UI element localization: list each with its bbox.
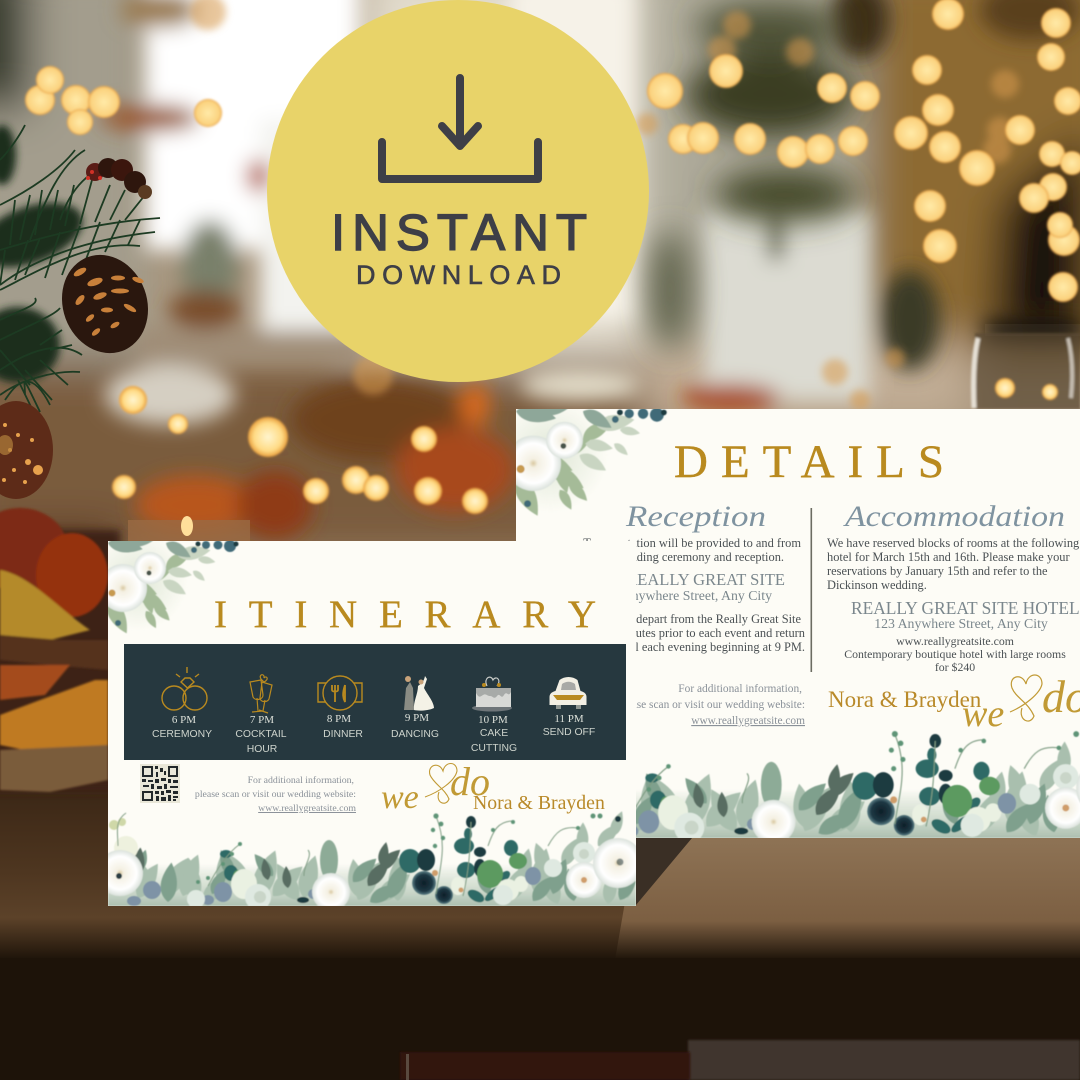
floral border: itinerary: [97, 809, 643, 911]
heading: details: DETAILS: [674, 436, 944, 488]
icon: wedding car: [550, 677, 586, 709]
badge text: download: DOWNLOAD: [356, 260, 561, 290]
couple names: details: Nora & Brayden: [828, 687, 982, 712]
wood table: [0, 785, 1080, 1080]
heading: itinerary: ITINERARY: [214, 593, 596, 636]
text block: accommodation: REALLY GREAT SITE HOTEL: [851, 598, 1080, 618]
wine glass: [973, 333, 1080, 409]
schedule band: [124, 644, 626, 760]
badge text: instant: INSTANT: [331, 204, 587, 261]
schedule labels: 8 PM: [327, 713, 351, 725]
pine needles: [0, 125, 160, 415]
schedule labels: CEREMONY: [152, 729, 212, 740]
schedule labels: DANCING: [391, 729, 439, 740]
text block: accommodation: Dickinson wedding.: [827, 578, 927, 592]
bokeh lights: [25, 0, 1080, 514]
text block: accommodation: We have reserved blocks of rooms at the following: [827, 536, 1079, 550]
schedule labels: 10 PM: [478, 714, 508, 726]
text block: reception details: 30 minutes prior to each event and return: [601, 626, 805, 640]
text block: accommodation: 123 Anywhere Street, Any City: [874, 616, 1048, 631]
schedule labels: 7 PM: [250, 714, 274, 726]
schedule labels: [152, 712, 595, 755]
we do script: itinerary: [381, 759, 490, 816]
schedule labels: CUTTING: [471, 743, 517, 754]
website note: details: For additional information,: [678, 683, 802, 695]
website note: itinerary: [195, 775, 356, 814]
icon: dancing couple: [404, 676, 434, 711]
text block: accommodation: reservations by January 15th and refer to the: [827, 564, 1048, 578]
pine foliage mass: [0, 125, 91, 383]
icon: rings: [162, 667, 207, 710]
blurred restaurant background: [0, 0, 1080, 800]
schedule labels: 11 PM: [554, 713, 584, 725]
we do script: itinerary: we: [381, 779, 419, 816]
pine branch, cone and ornaments: [0, 125, 162, 792]
text block: accommodation: Contemporary boutique hotel with large rooms: [844, 647, 1066, 661]
text block: reception details: the wedding ceremony and reception.: [598, 550, 784, 564]
website note: details: please scan or visit our wedding website:: [618, 699, 805, 711]
we do script: details: [962, 671, 1080, 735]
we do script: details: we: [962, 693, 1004, 735]
floral corner: itinerary: [108, 541, 240, 634]
icon: champagne glasses: [250, 675, 272, 713]
text block: reception details: Shuttles will depart from the Really Great Site: [571, 612, 801, 626]
website note: details: www.reallygreatsite.com: [691, 715, 805, 727]
QR code: [140, 764, 180, 803]
text block: accommodation: [827, 536, 1080, 674]
schedule labels: 6 PM: [172, 714, 196, 726]
copper ornament: [0, 401, 53, 499]
schedule labels: HOUR: [247, 744, 278, 755]
schedule labels: DINNER: [323, 729, 363, 740]
schedule labels: 9 PM: [405, 712, 429, 724]
icon: download arrow and tray: [382, 78, 538, 179]
text block: accommodation: www.reallygreatsite.com: [896, 634, 1014, 648]
couple names: itinerary: Nora & Brayden: [473, 792, 605, 814]
icon: plate and cutlery: [318, 676, 362, 710]
text block: reception details: Transportation will be provided to and from: [583, 536, 801, 550]
autumn leaves and pumpkin: [0, 508, 120, 792]
text block: reception details: [571, 536, 805, 654]
we do script: itinerary: do: [450, 759, 490, 804]
schedule labels: COCKTAIL: [235, 729, 287, 740]
icon: cake: [472, 677, 512, 712]
website note: itinerary: www.reallygreatsite.com: [258, 803, 356, 814]
text block: reception details: 123 Anywhere Street, Any City: [598, 588, 772, 603]
website note: details: [618, 683, 805, 727]
heading: reception: Reception: [625, 500, 766, 533]
details card: [493, 397, 1080, 844]
text block: reception details: REALLY GREAT SITE: [626, 570, 785, 589]
blurred tree branches: [650, 2, 855, 350]
text block: accommodation: hotel for March 15th and 16th. Please make your: [827, 550, 1070, 564]
pine cone: [48, 243, 162, 365]
text block: reception details: to the hotel each evening beginning at 9 PM.: [583, 640, 805, 654]
website note: itinerary: For additional information,: [248, 775, 354, 786]
heading: accommodation: Accommodation: [843, 500, 1065, 533]
column divider: [810, 508, 812, 672]
itinerary card: [88, 531, 643, 911]
floral corner: details: [516, 409, 668, 516]
schedule labels: CAKE: [480, 728, 508, 739]
floral border: details: [636, 730, 1080, 838]
schedule labels: SEND OFF: [543, 727, 595, 738]
text block: accommodation: for $240: [935, 660, 975, 674]
website note: itinerary: please scan or visit our wedding website:: [195, 789, 356, 800]
small red pine cone: [86, 158, 152, 199]
instant download badge: [267, 0, 649, 382]
